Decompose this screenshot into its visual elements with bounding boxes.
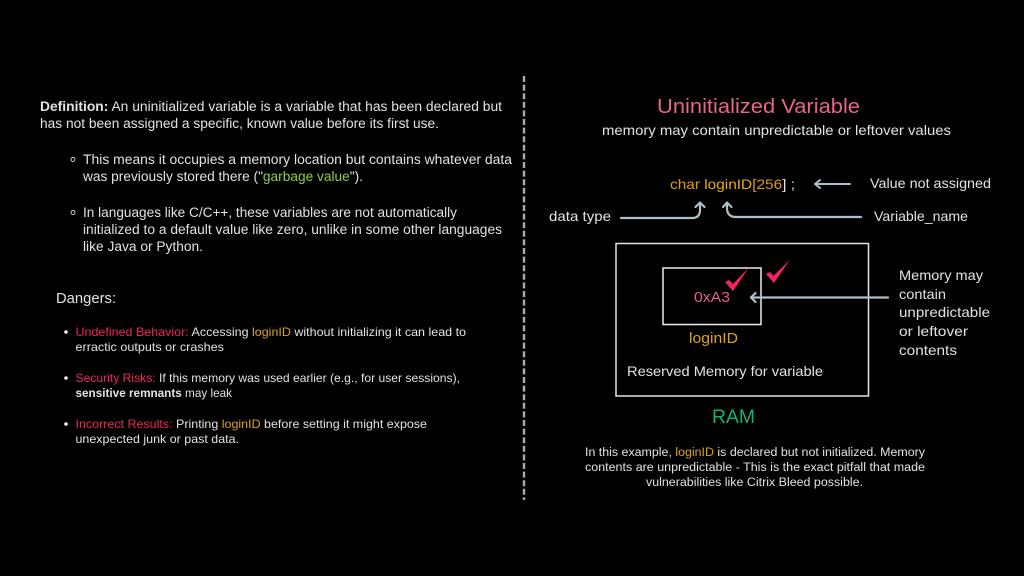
footer note <box>585 447 925 489</box>
title: Uninitialized Variable <box>657 95 860 118</box>
label: data type: data type <box>549 208 611 224</box>
code declaration: char loginID [256] ; <box>670 176 795 192</box>
arrow: data type <box>621 202 704 218</box>
footer note: contents are unpredictable - This is the exact pitfall that made <box>585 462 925 474</box>
memory cell box <box>663 268 761 324</box>
icon: check mark 2 <box>766 260 790 283</box>
note: memory may contain: contain <box>899 286 946 302</box>
arrow: variable name <box>723 202 861 217</box>
label: variable name: Variable_name <box>874 208 968 224</box>
label: reserved memory: Reserved Memory for variable <box>627 363 823 379</box>
explanation bullets: like Java or Python. <box>83 239 203 254</box>
explanation bullets: was previously stored there ("garbage value"). <box>82 169 363 184</box>
RAM box <box>616 244 868 396</box>
explanation bullets: This means it occupies a memory location but contains whatever data <box>83 152 512 167</box>
definition text block: Definition: An uninitialized variable is a variable that has been declared but <box>40 99 502 114</box>
note: memory may contain: Memory may <box>899 267 983 283</box>
value 0xA3: 0xA3 <box>694 290 730 306</box>
definition text block: has not been assigned a specific, known value before its first use. <box>40 116 439 131</box>
arrow: memory contents <box>751 293 888 302</box>
footer note: vulnerabilities like Citrix Bleed possible. <box>646 477 863 489</box>
label: value not assigned: Value not assigned <box>870 175 991 191</box>
RAM label: RAM <box>712 406 755 428</box>
dangers list: erractic outputs or crashes <box>76 340 224 354</box>
explanation bullets: initialized to a default value like zero, unlike in some other languages <box>83 222 502 237</box>
dangers heading: Dangers: <box>56 290 116 307</box>
subtitle: memory may contain unpredictable or leftover values <box>602 122 951 138</box>
explanation bullets <box>71 152 512 254</box>
arrow: value not assigned <box>815 180 850 188</box>
definition text block <box>40 99 502 131</box>
footer note: In this example, loginID is declared but not initialized. Memory <box>585 447 925 459</box>
dangers list <box>64 325 466 446</box>
label: loginID: loginID <box>689 330 738 347</box>
note: memory may contain: or leftover <box>899 323 968 339</box>
dangers list: unexpected junk or past data. <box>76 432 239 446</box>
dangers list: Security Risks: If this memory was used earlier (e.g., for user sessions), <box>76 371 460 385</box>
icon: check mark 1 <box>725 268 749 291</box>
note: memory may contain: contents <box>899 342 957 358</box>
dangers list: Incorrect Results: Printing loginID before setting it might expose <box>76 417 427 431</box>
note: memory may contain: unpredictable <box>899 304 990 320</box>
explanation bullets: In languages like C/C++, these variables are not automatically <box>83 205 457 220</box>
dangers list: Undefined Behavior: Accessing loginID without initializing it can lead to <box>76 325 466 339</box>
note: memory may contain <box>899 267 990 358</box>
dangers list: sensitive remnants may leak <box>76 386 233 400</box>
